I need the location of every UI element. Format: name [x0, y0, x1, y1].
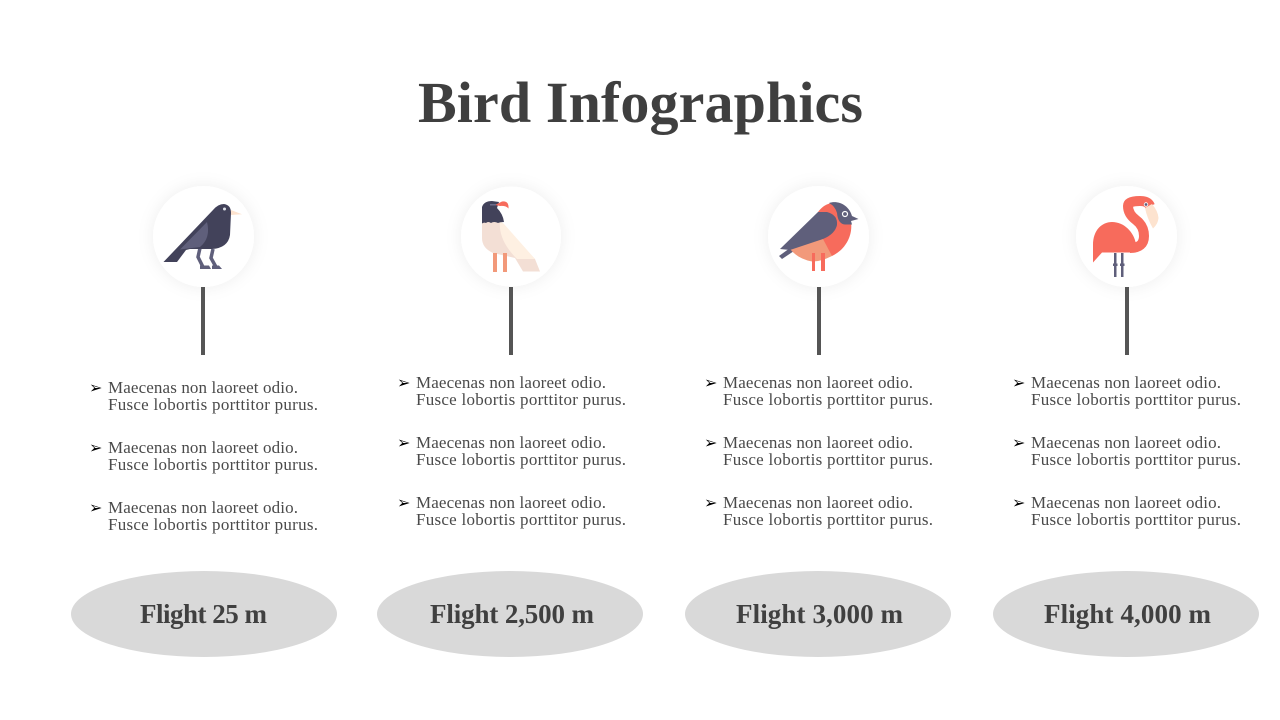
bullet list: Maecenas non laoreet odio.	[416, 493, 606, 512]
bullet list: Fusce lobortis porttitor purus.	[1031, 510, 1241, 529]
bullet list: Maecenas non laoreet odio.	[723, 433, 913, 452]
flight label	[377, 571, 643, 657]
bullet list	[704, 373, 933, 529]
bullet list: Fusce lobortis porttitor purus.	[723, 510, 933, 529]
bullet list: ➢	[397, 433, 410, 452]
bullet list: Fusce lobortis porttitor purus.	[416, 450, 626, 469]
connector line	[817, 287, 821, 355]
bullet list: Maecenas non laoreet odio.	[416, 373, 606, 392]
panel: bullfinch column	[685, 186, 951, 657]
panel: crow column	[71, 186, 337, 657]
bullet list: Maecenas non laoreet odio.	[108, 438, 298, 457]
bullet list: ➢	[1012, 373, 1025, 392]
bullet list: ➢	[1012, 433, 1025, 452]
bullet list: Fusce lobortis porttitor purus.	[723, 390, 933, 409]
bullet list: Maecenas non laoreet odio.	[416, 433, 606, 452]
icon: flamingo	[1076, 186, 1177, 287]
connector line	[1125, 287, 1129, 355]
panel: flamingo column	[993, 186, 1259, 657]
bullet list: Fusce lobortis porttitor purus.	[108, 515, 318, 534]
bullet list: Fusce lobortis porttitor purus.	[1031, 450, 1241, 469]
bullet list: Maecenas non laoreet odio.	[723, 373, 913, 392]
bullet list: Fusce lobortis porttitor purus.	[723, 450, 933, 469]
panel: eagle column	[377, 186, 643, 657]
flight label: Flight 25 m	[140, 599, 268, 629]
bullet list: Fusce lobortis porttitor purus.	[108, 395, 318, 414]
bullet list: Maecenas non laoreet odio.	[723, 493, 913, 512]
connector line	[509, 287, 513, 355]
bullet list: Maecenas non laoreet odio.	[108, 378, 298, 397]
flight label: Flight 3,000 m	[736, 599, 904, 629]
connector line	[201, 287, 205, 355]
flight label: Flight 4,000 m	[1044, 599, 1212, 629]
bullet list: ➢	[1012, 493, 1025, 512]
bullet list: Fusce lobortis porttitor purus.	[1031, 390, 1241, 409]
bullet list	[1012, 373, 1241, 529]
bullet list: ➢	[89, 378, 102, 397]
bullet list: Fusce lobortis porttitor purus.	[416, 510, 626, 529]
flight label: Flight 2,500 m	[430, 599, 594, 629]
bullet list: Fusce lobortis porttitor purus.	[416, 390, 626, 409]
flight label	[993, 571, 1259, 657]
flight label	[71, 571, 337, 657]
bullet list: Maecenas non laoreet odio.	[1031, 433, 1221, 452]
bullet list: ➢	[89, 498, 102, 517]
bullet list: Maecenas non laoreet odio.	[1031, 493, 1221, 512]
bullet list: Maecenas non laoreet odio.	[1031, 373, 1221, 392]
bullet list: ➢	[704, 373, 717, 392]
bullet list: ➢	[704, 433, 717, 452]
icon: eagle	[461, 186, 561, 286]
icon: bullfinch	[768, 186, 869, 287]
bullet list: Fusce lobortis porttitor purus.	[108, 455, 318, 474]
title: Bird Infographics	[418, 70, 863, 135]
bullet list	[397, 373, 626, 529]
icon: crow	[153, 186, 254, 287]
bullet list: ➢	[89, 438, 102, 457]
bullet list: ➢	[397, 493, 410, 512]
bullet list: ➢	[397, 373, 410, 392]
bullet list	[89, 378, 318, 534]
bullet list: ➢	[704, 493, 717, 512]
flight label	[685, 571, 951, 657]
bullet list: Maecenas non laoreet odio.	[108, 498, 298, 517]
